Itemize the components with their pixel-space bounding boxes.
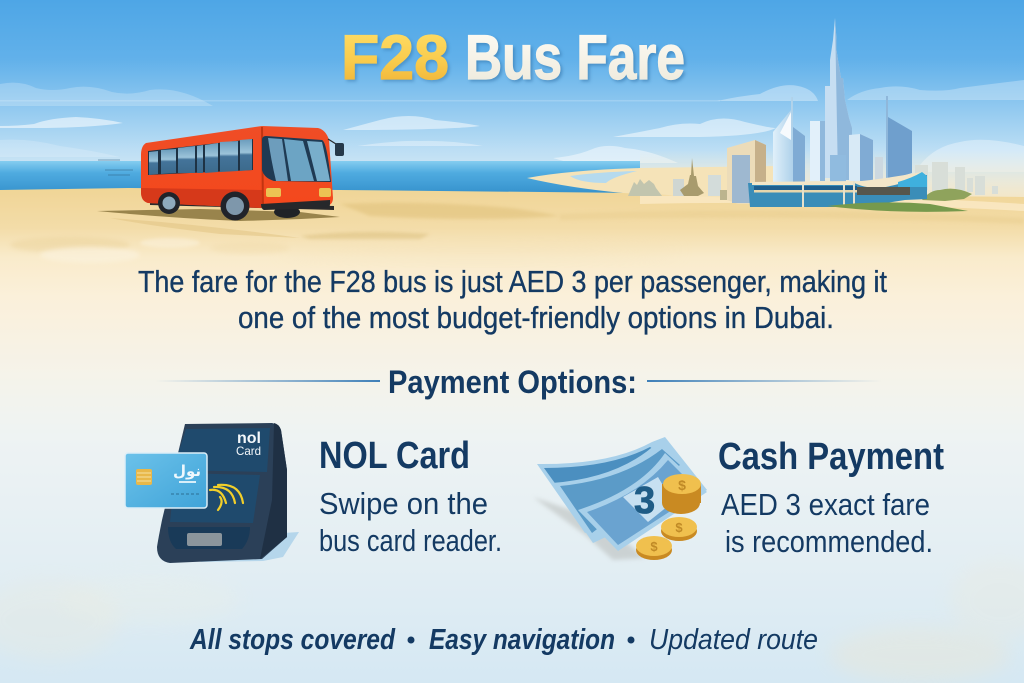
- cash payment text: is recommended.: [725, 524, 933, 559]
- reader label: nol: [237, 430, 261, 447]
- NOL card text: bus card reader.: [319, 523, 502, 558]
- cash payment text: AED 3 exact fare: [721, 487, 930, 522]
- tan office block: [727, 140, 766, 204]
- coin front: [636, 536, 672, 560]
- side mirror: [328, 139, 336, 144]
- mid tower: [849, 134, 873, 181]
- title: Bus Fare: [465, 23, 685, 93]
- bus body: [141, 126, 333, 208]
- skyline illustration: [527, 18, 998, 212]
- NOL card text: Swipe on the: [319, 486, 488, 521]
- sea: [0, 160, 640, 195]
- distant city: [628, 158, 728, 200]
- bushes: [922, 189, 972, 201]
- front wheel: [220, 192, 250, 220]
- title: [341, 23, 687, 95]
- banknotes: [537, 437, 707, 533]
- reader label: Card: [236, 444, 261, 458]
- title: Bus Fare: [467, 25, 687, 95]
- intro text: [138, 264, 887, 335]
- footer tagline: All stops covered: [189, 624, 396, 656]
- title: F28: [341, 23, 449, 93]
- central supertall: [825, 18, 852, 178]
- title: F28: [343, 25, 451, 95]
- bus underside: [150, 201, 334, 210]
- horizon haze behind city: [640, 150, 1024, 200]
- right tower: [886, 96, 888, 181]
- rear wheel: [158, 192, 180, 214]
- front bumper: [261, 200, 330, 210]
- NOL card text: [319, 435, 502, 558]
- headlights: [266, 188, 281, 197]
- nol card: [125, 453, 207, 508]
- footer tagline: Updated route: [649, 624, 818, 656]
- terminal building: [748, 175, 927, 207]
- nol card: نول: [173, 463, 201, 480]
- contactless waves: [210, 485, 243, 510]
- background: sky: [0, 0, 1024, 200]
- front hidden wheel: [274, 206, 300, 218]
- twin tower left: [773, 97, 793, 182]
- clouds: [0, 80, 1024, 172]
- cash payment text: [718, 436, 944, 559]
- coin middle: [661, 517, 697, 541]
- intro text: The fare for the F28 bus is just AED 3 per passenger, making it: [138, 264, 887, 299]
- sand texture: [0, 195, 1024, 683]
- cash payment text: Cash Payment: [718, 436, 944, 478]
- sand spit: [527, 166, 780, 200]
- background: sand fading to pale blue: [0, 188, 1024, 683]
- front left tower: [810, 121, 825, 181]
- bus ground shadow: [97, 209, 340, 221]
- coin middle: $: [675, 520, 683, 535]
- reader label: [236, 430, 261, 458]
- lawn: [827, 202, 968, 212]
- footer tagline: [189, 624, 818, 656]
- coin front: $: [650, 539, 658, 554]
- icon: cash and coins: [533, 437, 707, 560]
- NOL card text: NOL Card: [319, 435, 470, 477]
- coin stack: $: [678, 477, 686, 493]
- bus illustration: [97, 126, 344, 221]
- icon: NOL card reader: [125, 423, 299, 563]
- windshield: [262, 136, 331, 182]
- intro text: one of the most budget-friendly options in Dubai.: [238, 300, 834, 335]
- payment options heading: Payment Options:: [388, 364, 637, 400]
- coin stack: [662, 474, 701, 514]
- far right buildings: [915, 162, 998, 195]
- footer tagline: Easy navigation: [429, 624, 615, 656]
- side windows: [148, 139, 253, 175]
- denomination: 3: [634, 480, 655, 522]
